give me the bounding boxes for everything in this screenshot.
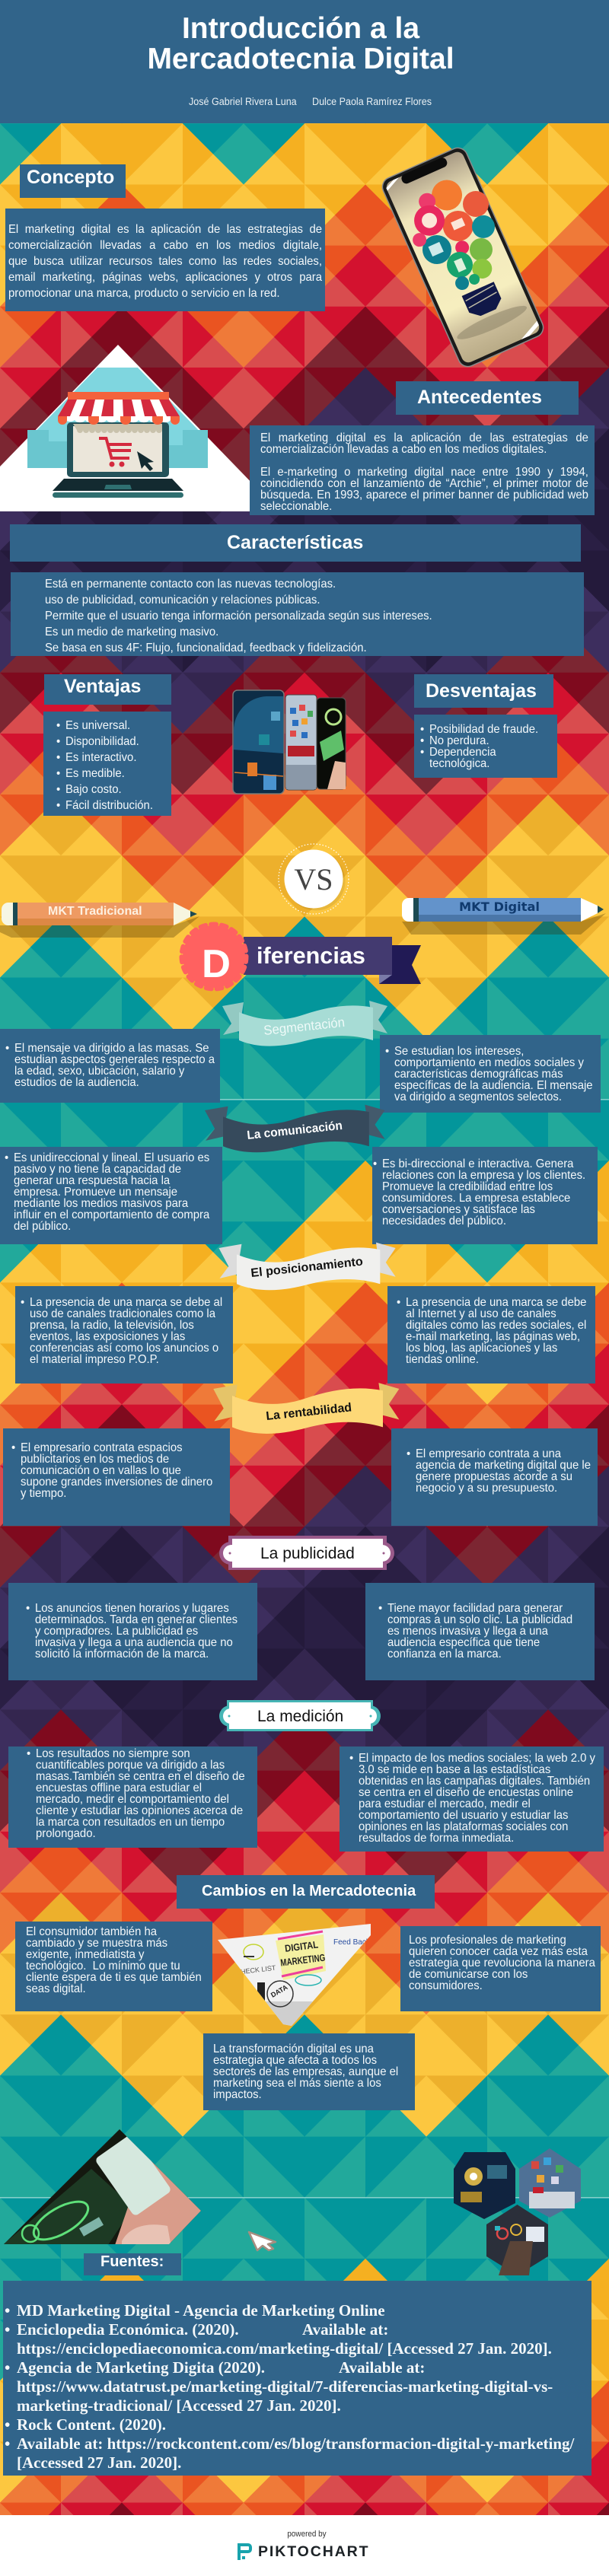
panel: rentabilidad digital: genere propuestas acorde a su (416, 1470, 572, 1482)
panel: publicidad tradicional: Los anuncios tienen horarios y lugares (35, 1601, 229, 1615)
panel: desventajas list: Posibilidad de fraude. (429, 723, 538, 735)
panel: posicionamiento digital: los blog, las aplicaciones y las (406, 1341, 557, 1355)
panel: antecedentes text: seleccionable. (260, 499, 332, 513)
panel: segmentación digital: va dirigido a segmentos selectos. (394, 1090, 562, 1103)
panel: posicionamiento digital (387, 1286, 595, 1384)
panel: comunicación tradicional: del público. (14, 1219, 71, 1233)
panel: fuentes list: [Accessed 27 Jan. 2020]. (17, 2453, 181, 2472)
panel: fuentes list: Available at: (339, 2358, 425, 2376)
panel: publicidad tradicional (8, 1583, 257, 1680)
panel: ventajas list: Fácil distribución. (65, 799, 153, 811)
author: Dulce Paola Ramírez Flores: Dulce Paola Ramírez Flores (312, 96, 432, 107)
badge: La medición (219, 1700, 381, 1731)
panel: profesionales: de comunicarse con los (409, 1968, 528, 1980)
panel: fuentes list: https://www.datatrust.pe/marketing-digital/7-diferencias-marketing-digital-vs- (17, 2377, 553, 2396)
panel: rentabilidad digital (391, 1428, 598, 1526)
panel: antecedentes text: El marketing digital es la aplicación de las estrategias de (260, 431, 588, 444)
panel: rentabilidad tradicional: comunicación o en vallas lo que (21, 1464, 181, 1476)
heading: Desventajas: Desventajas (426, 680, 537, 702)
panel: segmentación digital: comportamiento en medios sociales y (394, 1056, 584, 1068)
panel: consumidor: cambiado y se muestra más (26, 1936, 167, 1950)
image: digital marketing whiteboard: DIGITAL (284, 1939, 319, 1954)
panel: profesionales: quieren conocer cada vez más esta (409, 1945, 588, 1957)
panel: consumidor (15, 1922, 212, 2011)
title: Introducción a la (182, 12, 419, 45)
panel: publicidad tradicional: determinados. Tarda en generar clientes (35, 1613, 238, 1626)
panel: posicionamiento tradicional: La presencia de una marca se debe al (30, 1295, 222, 1309)
panel: segmentación digital (380, 1035, 601, 1113)
panel: profesionales: estrategia que revoluciona la manera (409, 1956, 595, 1969)
heading: Antecedentes: Antecedentes (417, 387, 542, 408)
panel: posicionamiento tradicional: conferencias así como los anuncios o (30, 1341, 218, 1355)
panel: comunicación tradicional: Es unidireccional y lineal. El usuario es (14, 1151, 209, 1164)
heading: Concepto (20, 164, 126, 198)
panel: medición tradicional: cuantificables porque va dirigido a las (36, 1758, 225, 1772)
panel: concepto text: comercialización llevadas a cabo en los medios digitale, (8, 239, 322, 251)
panel: medición digital: comportamiento del usuario y estudiar las (359, 1808, 568, 1822)
panel: comunicación digital: Promueve la credibilidad entre los (382, 1180, 553, 1193)
panel: comunicación tradicional: influir en el comportamiento de compra (14, 1208, 209, 1221)
icon: smartphone with idea light bulb (382, 148, 544, 367)
panel: desventajas list (414, 715, 557, 778)
ribbon: Segmentación: Segmentación (263, 1014, 346, 1038)
panel: segmentación tradicional (0, 1029, 220, 1103)
panel: posicionamiento digital: digitales como las redes sociales, el (406, 1318, 586, 1332)
ribbon: La comunicación: La comunicación (247, 1119, 343, 1142)
panel: medición tradicional: prolongado. (36, 1826, 96, 1840)
panel: profesionales: consumidores. (409, 1979, 483, 1992)
ribbon: El posicionamiento (219, 1242, 396, 1291)
ribbon: La rentabilidad (213, 1383, 399, 1434)
badge: La publicidad: La publicidad (260, 1545, 355, 1562)
panel: fuentes list: Rock Content. (2020). (17, 2415, 166, 2434)
panel: posicionamiento tradicional: eventos, las exposiciones y las (30, 1330, 185, 1342)
heading: Fuentes: Fuentes: (100, 2253, 164, 2270)
panel: características list: Se basa en sus 4F: Flujo, funcionalidad, feedback y fidelización. (45, 641, 367, 654)
author: José Gabriel Rivera Luna: José Gabriel Rivera Luna (189, 96, 297, 107)
panel: consumidor: cliente espera de ti es que también (26, 1971, 202, 1983)
panel: medición tradicional: mercado, medir el comportamiento del (36, 1793, 229, 1805)
panel: posicionamiento digital: La presencia de una marca se debe (406, 1295, 586, 1309)
panel: consumidor: exigente, inmediatista y (26, 1948, 144, 1960)
panel: publicidad tradicional: y compradores. La publicidad es (35, 1624, 198, 1638)
panel: antecedentes text: El e-marketing o marketing digital nace entre 1990 y 1994, (260, 466, 588, 478)
panel: medición digital: obtenidas en las campañas digitales. También (359, 1775, 590, 1787)
heading: Ventajas (44, 674, 171, 705)
panel: fuentes list: Enciclopedia Económica. (2020). (17, 2320, 239, 2338)
panel: publicidad digital (365, 1583, 595, 1680)
heading: Concepto: Concepto (27, 167, 114, 188)
panel: ventajas list: Bajo costo. (65, 782, 122, 796)
pencil: MKT Digital (402, 898, 606, 935)
panel: comunicación digital: Es bi-direccional e interactiva. Genera (382, 1157, 573, 1170)
panel: medición tradicional: masas.También se centra en el diseño de (36, 1770, 245, 1782)
panel: antecedentes text: coincidiendo con el lanzamiento de “Archie”, el primer motor de (260, 476, 588, 490)
ribbon: La comunicación (205, 1105, 385, 1152)
pencil: MKT Tradicional: MKT Tradicional (48, 905, 142, 918)
heading: Antecedentes (396, 381, 579, 415)
panel: transformación digital: estrategia que afecta a todos los (213, 2053, 377, 2067)
panel: segmentación tradicional: la edad, sexo, ubicación, salario y (14, 1064, 184, 1078)
panel: rentabilidad tradicional: publicitarios en los medios de (21, 1452, 169, 1466)
panel: rentabilidad digital: El empresario contrata a una (416, 1447, 561, 1460)
panel: medición digital: 3.0 se mide en base a las estadísticas (359, 1762, 550, 1776)
image: three hexagon photos (454, 2148, 581, 2275)
panel: comunicación digital: necesidades del público. (382, 1215, 505, 1227)
footer (0, 2515, 609, 2576)
panel: fuentes list: Agencia de Marketing Digita (2020). (17, 2358, 265, 2376)
panel: antecedentes text (250, 425, 595, 515)
panel: rentabilidad tradicional: y tiempo. (21, 1487, 66, 1499)
panel: características list (11, 572, 584, 656)
powered by: powered by (287, 2530, 327, 2539)
panel: características list: Está en permanente contacto con las nuevas tecnologías. (45, 577, 336, 591)
panel: rentabilidad digital: agencia de marketing digital que le (416, 1458, 591, 1472)
panel: transformación digital: sectores de las empresas, aunque el (213, 2065, 398, 2078)
pencil: MKT Digital: MKT Digital (459, 900, 540, 914)
panel: posicionamiento tradicional: el material impreso P.O.P. (30, 1353, 159, 1365)
heading: Características: Características (227, 532, 363, 553)
icon: VS circle (278, 843, 349, 915)
panel: publicidad digital: audiencia específica que tiene (387, 1636, 540, 1648)
panel: medición digital (340, 1747, 604, 1852)
icon: VS circle: VS (294, 862, 333, 896)
panel: rentabilidad digital: negocio y a su presupuesto. (416, 1481, 557, 1495)
panel: segmentación digital: Se estudian los intereses, (394, 1044, 524, 1058)
panel: segmentación digital: características demográficas más (394, 1067, 563, 1081)
panel: consumidor: El consumidor también ha (26, 1925, 157, 1938)
panel: medición digital: El impacto de los medios sociales; la web 2.0 y (359, 1752, 595, 1764)
panel: comunicación tradicional: empresa. Promueve un mensaje (14, 1186, 177, 1198)
heading: Desventajas (414, 674, 553, 708)
panel: publicidad tradicional: solicitó la información de la marca. (35, 1647, 209, 1661)
banner: Diferencias (180, 922, 421, 991)
image: digital marketing whiteboard: CHECK LIST (235, 1964, 276, 1976)
icon: online shop laptop in white triangle (0, 345, 250, 511)
badge: La medición: La medición (257, 1708, 343, 1725)
panel: desventajas list: Dependencia (429, 746, 496, 758)
panel: ventajas list: Es medible. (65, 767, 125, 779)
panel: posicionamiento digital: e-mail marketing, las páginas web, (406, 1330, 580, 1342)
panel: ventajas list (43, 712, 171, 816)
panel: transformación digital: marketing sea el más siente a los (213, 2076, 381, 2090)
icon: three smartphones (232, 689, 346, 794)
panel: ventajas list: Es universal. (65, 718, 130, 732)
panel: segmentación tradicional: estudian aspectos generales respecto a (14, 1053, 215, 1065)
panel: rentabilidad tradicional: El empresario contrata espacios (21, 1441, 183, 1454)
panel: consumidor: tecnológico. Lo mínimo que tu (26, 1959, 180, 1973)
panel: transformación digital: La transformación digital es una (213, 2043, 374, 2055)
image: digital marketing whiteboard: MARKETING (280, 1952, 326, 1969)
panel: comunicación digital: consumidores. La empresa establece (382, 1192, 570, 1204)
panel: medición digital: se centra en el diseño de encuestas online (359, 1785, 573, 1799)
panel: desventajas list: No perdura. (429, 734, 489, 747)
panel: fuentes list: https://enciclopediaeconomica.com/marketing-digital/ [Accessed 27 Jan. 2020]. (17, 2339, 552, 2358)
panel: medición tradicional: cliente y estudiar las opiniones acerca de (36, 1804, 243, 1817)
panel: posicionamiento tradicional: uso de canales tradicionales como la (30, 1307, 215, 1320)
panel: consumidor: seas digital. (26, 1982, 86, 1995)
panel: antecedentes text: comercialización llevadas a cabo en los medios digitales. (260, 443, 547, 455)
logo: Piktochart: PIKTOCHART (258, 2543, 369, 2560)
panel: rentabilidad tradicional: supone grandes inversiones de dinero (21, 1475, 212, 1489)
panel: medición digital: opiniones en las plataformas sociales con (359, 1820, 568, 1832)
panel: segmentación tradicional: El mensaje va dirigido a las masas. Se (14, 1041, 209, 1055)
panel: profesionales: Los profesionales de marketing (409, 1933, 566, 1947)
panel: segmentación digital: específicas de la audiencia. El mensaje (394, 1079, 593, 1091)
panel: medición tradicional: Los resultados no siempre son (36, 1747, 190, 1759)
panel: publicidad digital: confianza en la marca. (387, 1647, 502, 1661)
heading: Características (10, 524, 581, 562)
panel: posicionamiento tradicional: prensa, la radio, la televisión, los (30, 1318, 194, 1332)
icon: mouse cursor (248, 2231, 277, 2251)
panel: posicionamiento digital: al Internet y al uso de canales (406, 1307, 556, 1320)
panel: ventajas list: Disponibilidad. (65, 735, 139, 747)
heading: Cambios en la Mercadotecnia (177, 1875, 435, 1909)
panel: fuentes list: marketing-tradicional/ [Accessed 27 Jan. 2020]. (17, 2396, 341, 2414)
panel: concepto text: promocionar una marca, producto o servicio en la red. (8, 286, 279, 300)
panel: medición tradicional: la marca con resultados en un tiempo (36, 1816, 225, 1828)
image: hand with neon digital icons (4, 2129, 201, 2244)
ribbon: La rentabilidad: La rentabilidad (266, 1401, 352, 1423)
title (147, 12, 454, 75)
panel: comunicación tradicional: generar una respuesta hacia la (14, 1173, 170, 1187)
panel: posicionamiento digital: tiendas online. (406, 1353, 479, 1365)
panel: medición tradicional: encuestas offline para estudiar el (36, 1781, 202, 1794)
panel: concepto text: El marketing digital es la aplicación de las estrategias de (8, 222, 322, 236)
panel: comunicación digital: conversaciones y satisface las (382, 1202, 534, 1216)
panel: medición digital: para estudiar el mercado, medir el (359, 1797, 531, 1810)
panel: segmentación tradicional: estudios de la audiencia. (14, 1076, 139, 1088)
panel: profesionales (400, 1926, 601, 2011)
ribbon: Segmentación (222, 1001, 387, 1046)
panel: fuentes list: Available at: (302, 2320, 388, 2338)
panel: posicionamiento tradicional (15, 1286, 233, 1384)
panel: publicidad digital: Tiene mayor facilidad para generar (387, 1601, 563, 1615)
panel: comunicación tradicional (0, 1147, 222, 1244)
panel: concepto text: que busca utilizar recursos tales como las redes sociales, (8, 254, 322, 268)
panel: medición tradicional (8, 1747, 257, 1848)
panel: comunicación digital (372, 1147, 598, 1244)
panel: antecedentes text: búsqueda. En 1993, aparece el primer banner de publicidad web (260, 489, 588, 501)
panel: fuentes list: MD Marketing Digital - Agencia de Marketing Online (17, 2301, 385, 2320)
title: Mercadotecnia Digital (147, 43, 454, 75)
panel: transformación digital: impactos. (213, 2088, 262, 2100)
header band (0, 0, 609, 123)
panel: publicidad tradicional: invasiva y llega a una audiencia que no (35, 1636, 233, 1648)
heading: Ventajas: Ventajas (64, 676, 141, 697)
panel: publicidad digital: compras a un solo clic. La publicidad (387, 1613, 572, 1626)
panel: comunicación tradicional: pasivo y no tiene la capacidad de (14, 1163, 181, 1175)
panel: rentabilidad tradicional (3, 1428, 230, 1526)
banner: Diferencias: iferencias (257, 943, 365, 969)
panel: desventajas list: tecnológica. (429, 756, 489, 770)
banner: Diferencias: D (202, 942, 231, 986)
panel: características list: uso de publicidad, comunicación y relaciones públicas. (45, 594, 320, 606)
panel: transformación digital (203, 2033, 415, 2110)
panel: comunicación tradicional: mediante los medios masivos para (14, 1196, 188, 1210)
panel: características list: Es un medio de marketing masivo. (45, 626, 218, 638)
image: digital marketing whiteboard: DATA (269, 1983, 289, 1999)
panel: características list: Permite que el usuario tenga información personalizada según sus intereses. (45, 609, 432, 623)
heading: Cambios en la Mercadotecnia: Cambios en la Mercadotecnia (202, 1883, 416, 1899)
heading: Fuentes (84, 2253, 181, 2275)
panel: concepto text: email marketing, páginas webs, aplicaciones y otros para (8, 271, 322, 283)
ribbon: El posicionamiento: El posicionamiento (250, 1256, 364, 1280)
panel: concepto text (5, 209, 325, 311)
panel: fuentes list (3, 2281, 591, 2476)
panel: medición digital: resultados de forma inmediata. (359, 1831, 514, 1845)
panel: publicidad digital: es menos invasiva y llega a una (387, 1624, 548, 1638)
panel: fuentes list: Available at: https://rockcontent.com/es/blog/transformacion-digital-y-marketing/ (17, 2434, 574, 2452)
panel: comunicación digital: relaciones con la empresa y los clientes. (382, 1169, 585, 1181)
panel: ventajas list: Es interactivo. (65, 750, 136, 764)
image: digital marketing whiteboard: Feed Back (333, 1938, 371, 1947)
pencil: MKT Tradicional (0, 903, 199, 938)
badge: La publicidad (219, 1536, 394, 1570)
image: digital marketing whiteboard (218, 1924, 371, 2026)
